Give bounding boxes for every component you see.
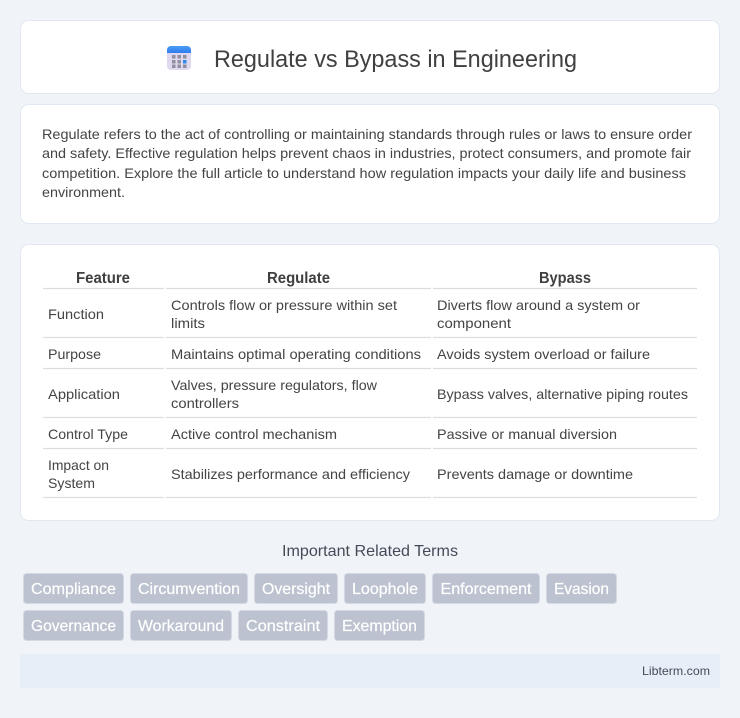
row: impact on system [48,457,633,491]
row: control type [48,426,617,442]
tag: loophole: Loophole [352,581,418,598]
row: impact on system: Impact on [48,457,109,473]
row: function: limits [171,315,205,331]
panel: header [20,20,720,94]
tag: governance [24,610,124,640]
tag: compliance: Compliance [31,581,116,598]
tag: constraint [238,610,328,640]
row: purpose: Purpose [48,346,101,362]
row: control type: Active control mechanism [171,426,337,442]
title: Regulate vs Bypass in Engineering [214,46,577,73]
footer [20,654,720,688]
tag: workaround [130,610,232,640]
tag: compliance [24,574,124,604]
intro paragraph [42,126,692,200]
tag: constraint: Constraint [246,618,321,635]
tag: governance: Governance [31,618,116,635]
tag: enforcement: Enforcement [440,581,532,598]
row: application [48,377,688,411]
tag: workaround: Workaround [138,618,224,635]
tag: oversight [254,574,338,604]
row: application: Bypass valves, alternative piping routes [437,386,688,402]
row: purpose [48,346,650,362]
panel: introduction [20,104,720,224]
table header row [76,270,591,287]
row: impact on system: System [48,475,95,491]
row: control type: Passive or manual diversion [437,426,617,442]
row: purpose: Avoids system overload or failure [437,346,650,362]
row: application: Valves, pressure regulators, flow [171,377,378,393]
row: function: Diverts flow around a system or [437,297,640,313]
tag: oversight: Oversight [262,581,331,598]
icon: calendar grid [167,46,191,70]
tag: evasion [546,574,616,604]
intro paragraph: competition. Explore the full article to understand how regulation impacts your daily life and business [42,165,686,181]
table header row: Bypass [539,270,591,287]
tag: exemption: Exemption [342,618,417,635]
row: function: Controls flow or pressure within set [171,297,397,313]
tag: circumvention [130,574,248,604]
tag: loophole [344,574,426,604]
table header row: Regulate [267,270,330,287]
tag: evasion: Evasion [554,581,609,598]
table header row: Feature [76,270,130,287]
row: impact on system: Stabilizes performance and efficiency [171,466,410,482]
heading: important related terms: Important Related Terms [282,543,458,560]
row: impact on system: Prevents damage or downtime [437,466,633,482]
tag: exemption [334,610,424,640]
footer: Libterm.com [642,664,710,678]
row: control type: Control Type [48,426,128,442]
row: function: component [437,315,511,331]
intro paragraph: environment. [42,184,125,200]
row: function: Function [48,306,104,322]
tag: circumvention: Circumvention [138,581,240,598]
row: function [48,297,640,331]
tag: enforcement [432,574,540,604]
row: purpose: Maintains optimal operating conditions [171,346,421,362]
panel: comparison table [20,244,720,520]
intro paragraph: and safety. Effective regulation helps prevent chaos in industries, protect consumers, and promote fair [42,145,691,161]
related term tags [24,574,616,640]
row: application: Application [48,386,120,402]
row: application: controllers [171,395,239,411]
intro paragraph: Regulate refers to the act of controlling or maintaining standards through rules or laws to ensure order [42,126,692,142]
